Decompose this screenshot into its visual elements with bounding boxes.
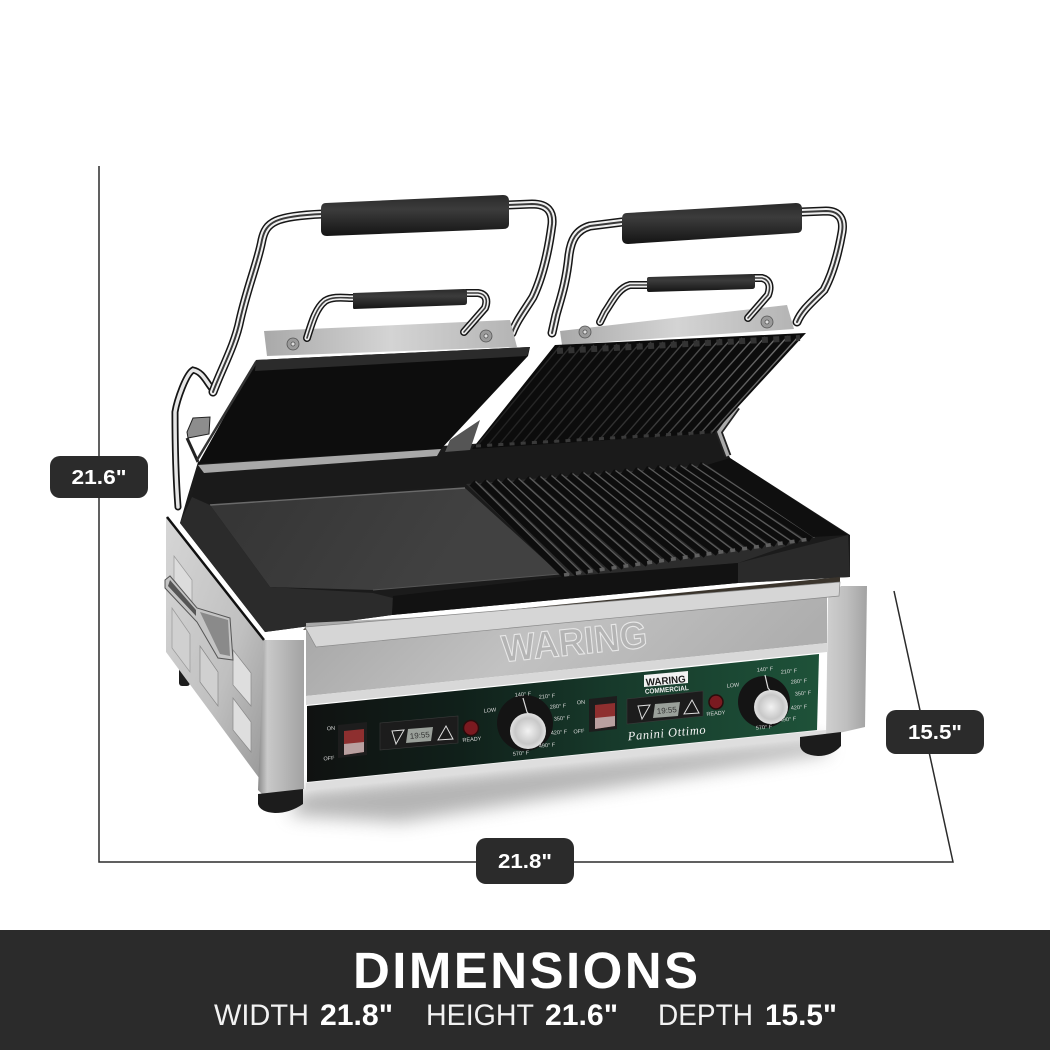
right post xyxy=(826,586,867,736)
width label: 21.8" xyxy=(498,851,552,873)
heading: DIMENSIONS xyxy=(353,942,698,999)
right timer display xyxy=(627,691,703,724)
right ready light xyxy=(709,695,723,709)
left side panel xyxy=(165,516,264,782)
left lid handles chrome xyxy=(213,204,552,392)
right inner tray wall xyxy=(707,458,848,537)
width spec: 21.8" xyxy=(320,999,393,1032)
steel strip below fascia xyxy=(306,643,827,705)
width spec: WIDTH xyxy=(214,999,309,1032)
left power switch xyxy=(338,722,367,758)
left timer display: 19:55 xyxy=(409,730,431,741)
left upper plate: smooth xyxy=(197,347,530,473)
height spec: HEIGHT xyxy=(426,999,534,1032)
screws xyxy=(287,316,773,350)
control panel xyxy=(306,654,826,790)
left timer display xyxy=(380,716,458,750)
left post xyxy=(258,640,304,796)
left temperature scale: 420° F xyxy=(551,729,568,737)
right temperature knob xyxy=(738,675,790,728)
right power switch xyxy=(589,696,617,732)
Waring Commercial badge xyxy=(644,671,690,696)
left temperature scale: 280° F xyxy=(550,703,567,711)
left lid steel plate xyxy=(264,320,517,356)
right temperature scale: 210° F xyxy=(781,668,798,676)
right temperature scale: 140° F xyxy=(757,666,774,674)
front left foot xyxy=(258,789,303,813)
embossed WARING logo: WARING xyxy=(500,614,649,671)
left ready light xyxy=(464,720,478,736)
left READY label: READY xyxy=(462,736,482,744)
right lid handles chrome xyxy=(552,211,842,333)
right timer display: 19:55 xyxy=(656,705,678,716)
front tray wall xyxy=(392,563,738,615)
depth spec: DEPTH xyxy=(658,999,753,1032)
depth spec xyxy=(658,999,837,1032)
left temperature knob xyxy=(497,695,553,751)
right READY label: READY xyxy=(706,710,726,718)
height label: 21.6" xyxy=(72,467,126,489)
footer band xyxy=(0,930,1050,1050)
left temperature scale: LOW xyxy=(483,707,497,715)
left temperature scale: 570° F xyxy=(513,750,530,758)
depth spec: 15.5" xyxy=(765,999,837,1032)
silver strip xyxy=(198,449,441,473)
left lid large grip xyxy=(321,195,509,236)
left temperature scale: 490° F xyxy=(539,742,556,750)
left OFF label: OFF xyxy=(323,755,335,763)
product: panini grill xyxy=(165,195,867,822)
rib end teeth xyxy=(564,539,810,575)
panel bottom lip xyxy=(306,730,826,790)
height label xyxy=(50,456,148,498)
left ON label: ON xyxy=(327,726,335,732)
width label xyxy=(476,838,574,884)
right lid small grip xyxy=(647,274,755,292)
front fascia xyxy=(306,597,827,696)
right ON label: ON xyxy=(577,700,585,706)
side latch xyxy=(165,576,233,660)
right temperature scale xyxy=(726,666,812,732)
right OFF label: OFF xyxy=(573,728,585,736)
brown edge above fascia xyxy=(303,577,840,630)
height spec xyxy=(426,999,618,1032)
left temperature scale: 140° F xyxy=(515,691,532,699)
width spec xyxy=(214,999,393,1032)
right lid steel plate xyxy=(560,305,794,345)
right temperature scale: 350° F xyxy=(795,690,812,698)
front left tray rim xyxy=(180,497,393,632)
Waring Commercial badge: WARING xyxy=(645,674,686,689)
right upper plate: grooved xyxy=(472,333,806,449)
rear tray wall xyxy=(192,430,730,505)
depth label: 15.5" xyxy=(908,722,962,744)
right temperature scale: 570° F xyxy=(756,724,773,732)
Waring Commercial badge: COMMERCIAL xyxy=(645,685,690,696)
left temperature scale: 350° F xyxy=(554,715,571,723)
left temperature scale: 210° F xyxy=(539,693,556,701)
right temperature scale: 420° F xyxy=(791,704,808,712)
Panini Ottimo wordmark: Panini Ottimo xyxy=(626,723,706,743)
right temperature scale: 490° F xyxy=(780,716,797,724)
grooved surface xyxy=(466,465,813,578)
griddle flat surface xyxy=(210,488,560,590)
front right tray corner xyxy=(738,535,850,583)
hinge hardware xyxy=(187,407,737,462)
depth label xyxy=(886,710,984,754)
right temperature scale: 280° F xyxy=(791,678,808,686)
right lid large grip xyxy=(622,203,802,244)
dimension lines xyxy=(99,166,953,862)
right temperature scale: LOW xyxy=(726,682,740,690)
small handle chrome xyxy=(307,278,770,338)
ground shadow xyxy=(290,738,830,822)
height spec: 21.6" xyxy=(545,999,618,1032)
rear chrome arm xyxy=(175,370,213,507)
left temperature scale xyxy=(483,691,571,758)
rear left foot xyxy=(179,668,190,686)
lower tray xyxy=(180,428,850,632)
drip tray lip xyxy=(305,582,840,647)
left lid small grip xyxy=(353,289,467,309)
front right foot xyxy=(800,732,841,756)
